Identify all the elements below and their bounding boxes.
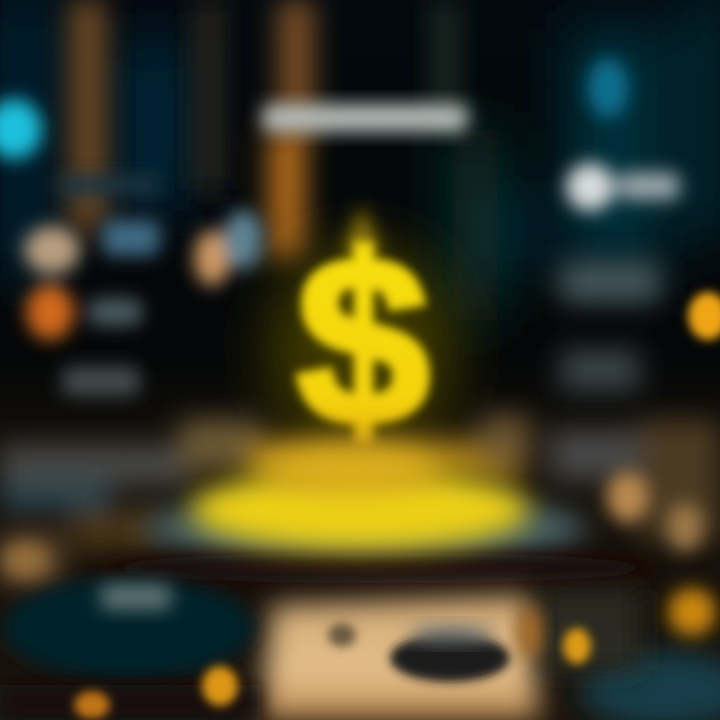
dollar tip [344, 205, 380, 256]
coins [3, 471, 716, 719]
bottom-left dark [0, 685, 260, 720]
bottom-right teal pad [580, 652, 720, 720]
center-left label [194, 210, 263, 286]
disc under shadow [100, 553, 660, 583]
disc [143, 494, 587, 562]
pad highlight [408, 625, 496, 643]
beige pedestal [260, 595, 540, 720]
pedestal dot [328, 623, 356, 647]
plate glow [260, 446, 440, 494]
blurred heading [262, 104, 468, 132]
right side dark [540, 590, 640, 670]
dark teal pad [3, 578, 253, 678]
dollar sign: $ [296, 207, 430, 475]
dollar glow [267, 240, 457, 460]
background glow: teal haze [0, 0, 720, 320]
hanging stripes [70, 0, 458, 260]
left labels [24, 175, 160, 396]
blurred label right [566, 163, 680, 211]
pad label [100, 584, 172, 610]
blue glow left [0, 99, 42, 159]
gold plate [190, 470, 530, 550]
blue glow upper right [588, 58, 628, 118]
blurred text right [560, 262, 660, 390]
lower scene haze [0, 415, 720, 585]
dark pad [390, 634, 510, 682]
orange dot right [688, 292, 720, 340]
